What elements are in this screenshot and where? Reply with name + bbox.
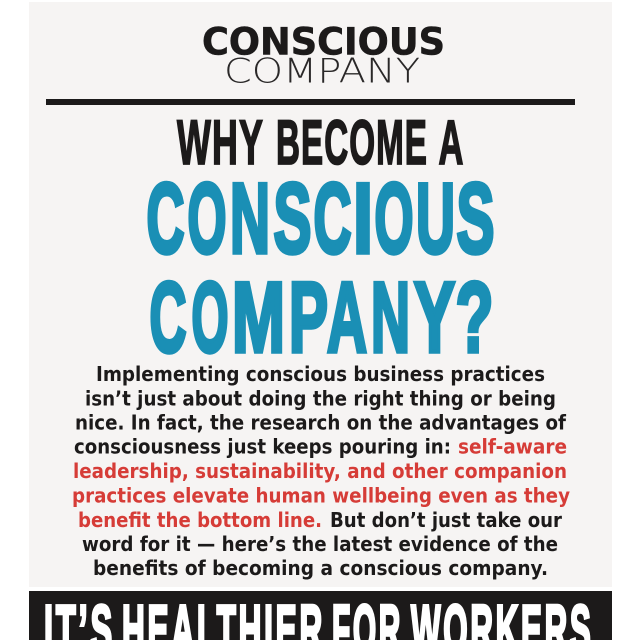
title: company: Y <box>414 262 455 372</box>
title: why become a: BECOME <box>276 108 428 178</box>
title: conscious: I <box>353 162 373 274</box>
title: conscious: S <box>274 162 312 274</box>
title: conscious: N <box>230 162 270 274</box>
intro paragraph: word for it — here’s the latest evidence of the <box>82 532 558 556</box>
title: company <box>150 262 494 372</box>
intro paragraph: practices elevate human wellbeing even as they <box>72 484 570 508</box>
section banner <box>29 591 612 640</box>
title: company: M <box>232 262 285 372</box>
intro paragraph: isn’t just about doing the right thing or being <box>85 386 556 410</box>
intro paragraph: But don’t just take our <box>330 508 563 532</box>
intro paragraph: benefits of becoming a conscious company. <box>93 556 548 580</box>
intro paragraph: leadership, sustainability, and other companion <box>73 459 567 483</box>
intro paragraph: Implementing conscious business practices <box>96 362 545 386</box>
title: company: O <box>192 262 228 372</box>
title: conscious: O <box>374 162 414 274</box>
title: conscious <box>146 162 494 274</box>
header rule <box>46 99 575 105</box>
title: company: C <box>150 262 186 372</box>
intro paragraph: self-aware <box>458 434 567 458</box>
intro paragraph <box>72 362 570 580</box>
title: company: A <box>327 262 367 372</box>
intro paragraph: consciousness just keeps pouring in: <box>74 434 451 458</box>
title: conscious: S <box>456 162 494 274</box>
title: company: P <box>289 262 328 372</box>
logo: Conscious Company: CONSCIOUS <box>202 20 445 64</box>
intro paragraph: benefit the bottom line. <box>78 508 322 532</box>
title: why become a: A <box>438 108 464 178</box>
title: why become a: WHY <box>177 108 264 178</box>
intro paragraph: nice. In fact, the research on the advantages of <box>75 410 567 434</box>
title: conscious: C <box>314 162 352 274</box>
title: conscious: O <box>188 162 226 274</box>
logo: Conscious Company <box>202 20 445 92</box>
title: company: ? <box>456 262 494 372</box>
title: why become a <box>177 108 464 178</box>
logo: Conscious Company: COMPANY <box>224 52 420 92</box>
title: conscious: U <box>416 162 455 274</box>
title: conscious: C <box>146 162 184 274</box>
title: company: N <box>371 262 410 372</box>
